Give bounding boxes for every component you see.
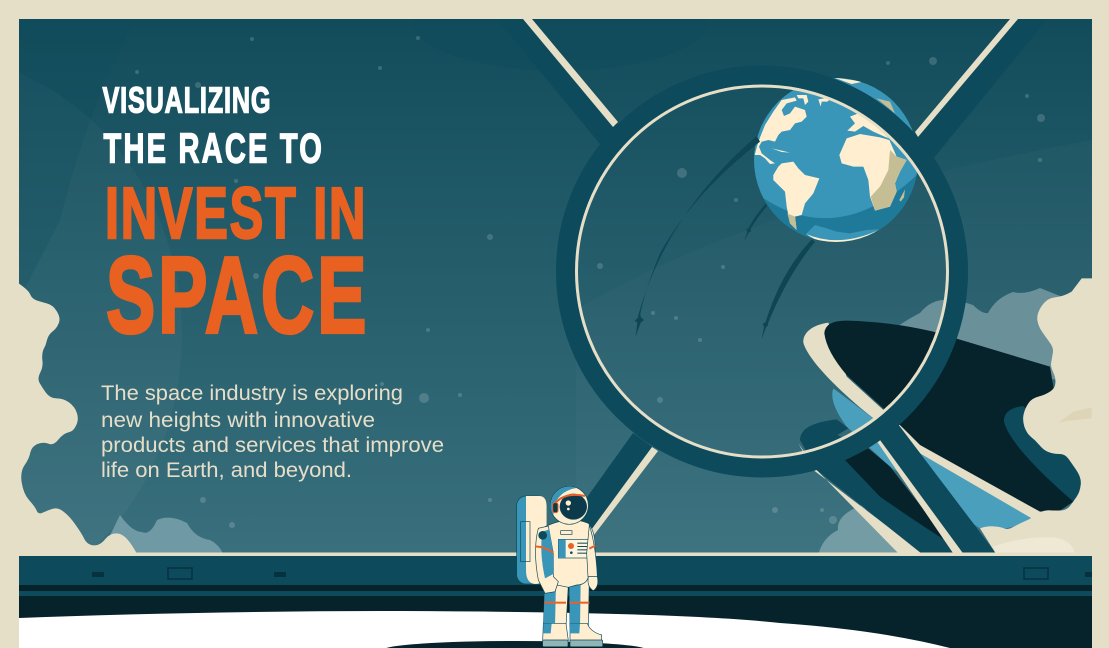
boots (543, 623, 603, 647)
cream strut lower right (878, 440, 962, 552)
left arm (535, 526, 558, 593)
struts behind the window (523, 19, 1028, 535)
intro paragraph: life on Earth, and beyond. (101, 459, 352, 482)
lower dish dark (845, 448, 944, 539)
astronaut shadow (383, 641, 647, 648)
lower dish cream (798, 443, 925, 555)
saucer dark body (824, 321, 1073, 512)
backpack (517, 496, 547, 584)
earth (752, 77, 922, 250)
intro paragraph: new heights with innovative (101, 409, 375, 432)
floor panel (19, 552, 1092, 648)
stars (135, 36, 1045, 528)
title line: space: SPACE (106, 234, 366, 356)
rocket trails (635, 136, 815, 339)
title line: the race to: THE RACE TO (104, 125, 322, 172)
dark strut lower right (880, 424, 998, 556)
space sky (19, 19, 1092, 552)
white ground (19, 611, 950, 648)
helmet (550, 486, 588, 524)
back clouds (100, 288, 1070, 556)
astronaut (517, 486, 603, 647)
continents (755, 77, 907, 230)
title (102, 80, 366, 356)
intro paragraph: The space industry is exploring (101, 382, 403, 405)
intro paragraph (101, 382, 444, 482)
window inner line (576, 86, 948, 457)
torso (545, 520, 595, 587)
intro paragraph: products and services that improve (101, 434, 444, 457)
chest panel (558, 539, 592, 558)
saucer right band (1004, 406, 1081, 502)
lower dish blue band (800, 419, 957, 555)
saucer blue underside (832, 388, 1032, 530)
left clouds (13, 283, 138, 557)
flying saucer (798, 321, 1092, 555)
title line: invest in: INVEST IN (105, 174, 365, 254)
right arm (587, 525, 598, 591)
right clouds (980, 278, 1100, 555)
legs (543, 578, 589, 627)
window ring (566, 76, 958, 468)
saucer cream rim (803, 323, 1043, 518)
title line: visualizing: VISUALIZING (102, 80, 270, 120)
